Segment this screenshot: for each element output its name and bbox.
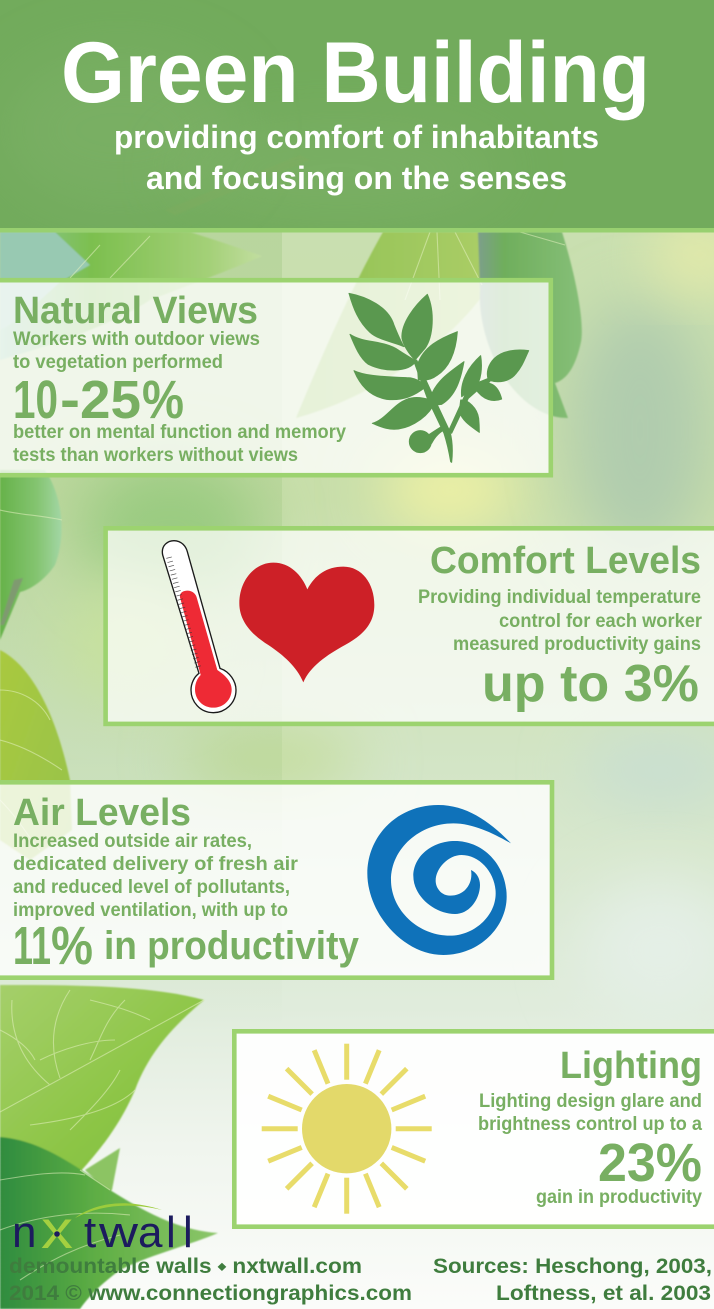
text: air description: improved ventilation, with up to <box>13 899 288 921</box>
subtitle <box>114 119 599 196</box>
footer credits: 2014 © www.connectiongraphics.com <box>9 1281 412 1305</box>
stat: 10-25%: 10 <box>13 370 58 430</box>
icon: heart <box>239 563 374 682</box>
footer credits: demountable walls ⬩ nxtwall.com <box>9 1254 362 1278</box>
footer sources <box>433 1254 712 1305</box>
text: intro: Workers with outdoor views <box>13 328 260 350</box>
icon: thermometer <box>162 541 236 713</box>
footer credits <box>9 1254 412 1305</box>
stat: 11% in productivity <box>13 916 360 976</box>
footer sources: Sources: Heschong, 2003, <box>433 1254 712 1278</box>
panel: lighting <box>234 1031 714 1227</box>
logo: nxtwall: l <box>183 1208 193 1257</box>
text: air description <box>13 830 298 921</box>
logo: nxtwall <box>12 1200 193 1260</box>
icon: blue air spiral <box>367 805 511 955</box>
stat: 11% in productivity: in productivity <box>104 924 360 968</box>
logo: nxtwall: a <box>138 1208 163 1257</box>
stat: 10-25%: 25 <box>80 370 141 430</box>
logo: nxtwall: w <box>98 1208 138 1257</box>
heading: comfort levels: Comfort Levels <box>430 540 701 582</box>
text: lighting description <box>478 1090 702 1135</box>
text: outcome: tests than workers without views <box>13 444 298 466</box>
heading: lighting: Lighting <box>560 1045 702 1087</box>
logo: nxtwall: l <box>166 1208 176 1257</box>
footer sources: Loftness, et al. 2003 <box>496 1281 711 1305</box>
subtitle: providing comfort of inhabitants <box>114 119 599 155</box>
icon: sun <box>262 1044 432 1214</box>
stat: 11% in productivity: % <box>51 916 93 976</box>
heading: natural views: Natural Views <box>13 290 258 332</box>
text: gain in productivity: gain in productivity <box>536 1186 702 1208</box>
title: Green Building <box>61 25 650 121</box>
panel: air levels <box>0 782 552 978</box>
text: air description: Increased outside air rates, <box>13 830 252 852</box>
header band <box>0 0 714 232</box>
text: intro <box>13 328 260 373</box>
text: comfort description <box>418 586 702 655</box>
stat: 10-25%: - <box>60 370 80 430</box>
text: air description: dedicated delivery of fresh air <box>13 853 298 875</box>
panel: comfort levels <box>106 528 714 724</box>
text: air description: and reduced level of pollutants, <box>13 876 290 898</box>
stat: 10-25% <box>13 370 184 430</box>
logo: nxtwall: x <box>41 1200 73 1260</box>
icon: leafy branch <box>349 293 529 462</box>
text: lighting description: Lighting design glare and <box>479 1090 702 1112</box>
logo: nxtwall: t <box>84 1208 96 1257</box>
stat: 10-25%: % <box>142 370 184 430</box>
stat: up to 3%: up to 3% <box>482 655 699 713</box>
text: intro: to vegetation performed <box>13 351 223 373</box>
text: comfort description: Providing individual temperature <box>418 586 701 608</box>
text: comfort description: control for each worker <box>499 610 702 632</box>
text: comfort description: measured productivity gains <box>453 633 701 655</box>
heading: air levels: Air Levels <box>13 792 191 834</box>
text: outcome: better on mental function and memory <box>13 421 346 443</box>
text: lighting description: brightness control up to a <box>478 1113 702 1135</box>
stat: 23%: 23% <box>598 1133 702 1193</box>
subtitle: and focusing on the senses <box>146 160 567 196</box>
stat: 11% in productivity: 11 <box>13 916 51 976</box>
panel: natural views <box>0 280 551 475</box>
text: outcome <box>13 421 346 466</box>
logo: nxtwall: n <box>12 1208 36 1257</box>
